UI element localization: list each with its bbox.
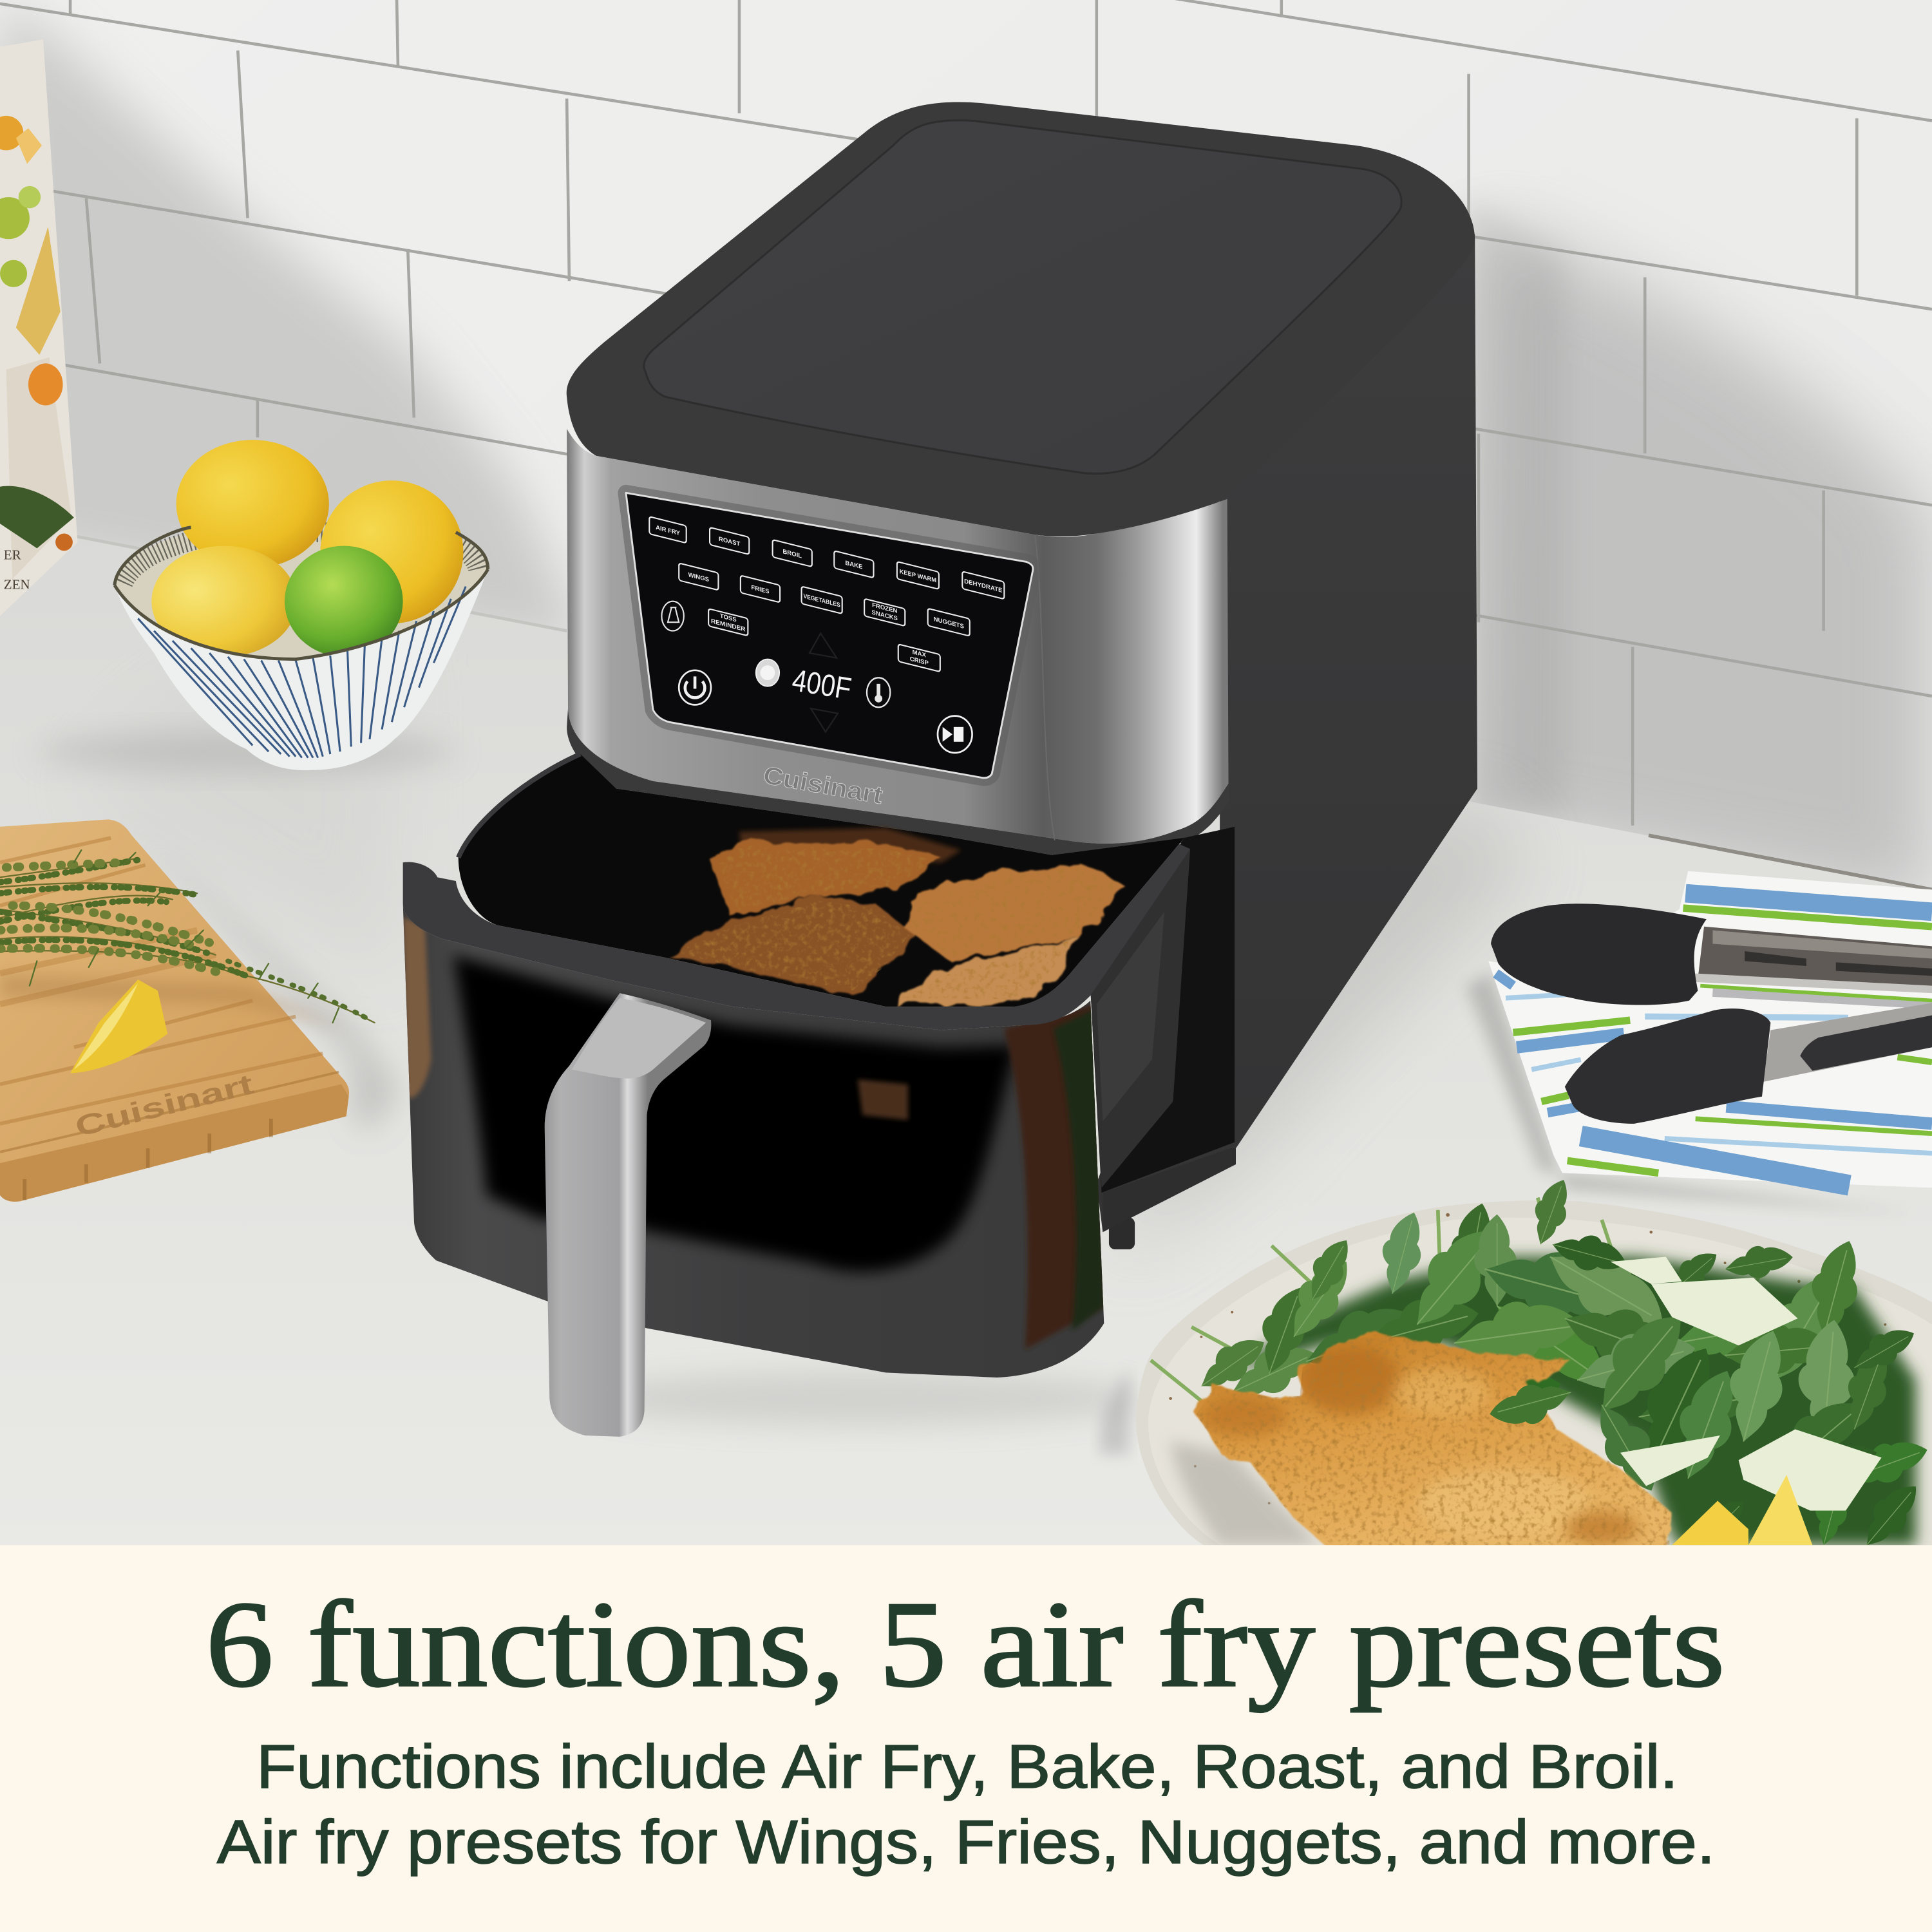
brand name: Cuisinart [761, 761, 885, 810]
button labels: NUGGETS [934, 616, 964, 630]
button labels: CRISP [910, 656, 929, 667]
thyme shadow [0, 973, 345, 1029]
book [0, 39, 78, 616]
button labels: DEHYDRATE [964, 578, 1003, 594]
button labels: FROZEN [872, 601, 897, 615]
button labels: FRIES [751, 584, 770, 596]
fried chicken in basket [667, 828, 1124, 1004]
button labels: AIR FRY [656, 524, 680, 537]
shadow on plate [1171, 1442, 1318, 1545]
bowl interior [115, 524, 488, 659]
button labels: MAX [913, 649, 926, 659]
preset buttons [649, 516, 1004, 672]
headline: 6 functions, 5 air fry presets [206, 1577, 1725, 1712]
button labels [656, 524, 1003, 667]
start stop icon [938, 716, 972, 753]
subhead line 2: Air fry presets for Wings, Fries, Nuggets, and more. [217, 1808, 1715, 1877]
drawer interior [459, 754, 1184, 1007]
button labels: BAKE [845, 560, 863, 571]
button labels: REMINDER [711, 618, 746, 633]
lower base [1103, 1148, 1236, 1232]
parmesan shavings [1611, 1257, 1882, 1511]
button labels: TOSS [720, 612, 737, 624]
salad stems [1151, 1198, 1768, 1401]
air fryer [403, 102, 1477, 1437]
rocket sprig over chicken [1485, 1375, 1577, 1434]
drawer cavity [1090, 827, 1235, 1193]
body side [1097, 234, 1477, 1232]
engraved brand: Cuisinart [72, 1068, 257, 1143]
lemon [151, 546, 297, 657]
tongs [1491, 904, 1932, 1124]
lid [567, 102, 1475, 536]
drawer foot [1109, 1217, 1135, 1249]
bowl with citrus [115, 440, 488, 770]
lemon [320, 480, 463, 623]
breaded chicken [1197, 1333, 1669, 1553]
button labels: VEGETABLES [803, 593, 840, 609]
button labels: BROIL [782, 548, 802, 560]
book: ER [4, 547, 21, 563]
lemon [176, 440, 329, 568]
lime [285, 546, 403, 657]
wall tiles [0, 0, 1932, 936]
button labels: SNACKS [872, 609, 898, 623]
countertop [0, 522, 1932, 1548]
up and down arrows [810, 633, 838, 732]
handle [545, 993, 711, 1437]
thermometer icon [867, 677, 890, 707]
drawer rim [403, 844, 1190, 1030]
clock icon [756, 659, 779, 687]
button labels: KEEP WARM [900, 568, 936, 584]
stainless steel band [567, 429, 1229, 858]
toss icon [661, 601, 684, 631]
lemon wedges [1672, 1501, 1748, 1545]
button labels: ROAST [719, 536, 740, 548]
bowl outside [115, 569, 488, 770]
control panel [626, 493, 1033, 778]
thyme [0, 850, 375, 1023]
subhead line 1: Functions include Air Fry, Bake, Roast, and Broil. [256, 1732, 1678, 1801]
drawer side [1090, 849, 1190, 1188]
recessed lid panel [644, 120, 1401, 473]
power icon [679, 670, 711, 705]
temperature display: 400F [790, 663, 853, 706]
book: ZEN [4, 577, 30, 592]
cutting board [0, 819, 375, 1202]
drawer front [403, 903, 1104, 1378]
towel [1488, 871, 1932, 1188]
plate with salad and chicken [1136, 1174, 1932, 1556]
lemon wedge [70, 980, 167, 1073]
arugula [1190, 1174, 1932, 1556]
button labels: WINGS [688, 571, 710, 583]
shadows on counter [37, 641, 1922, 1454]
caption band [0, 1545, 1932, 1932]
